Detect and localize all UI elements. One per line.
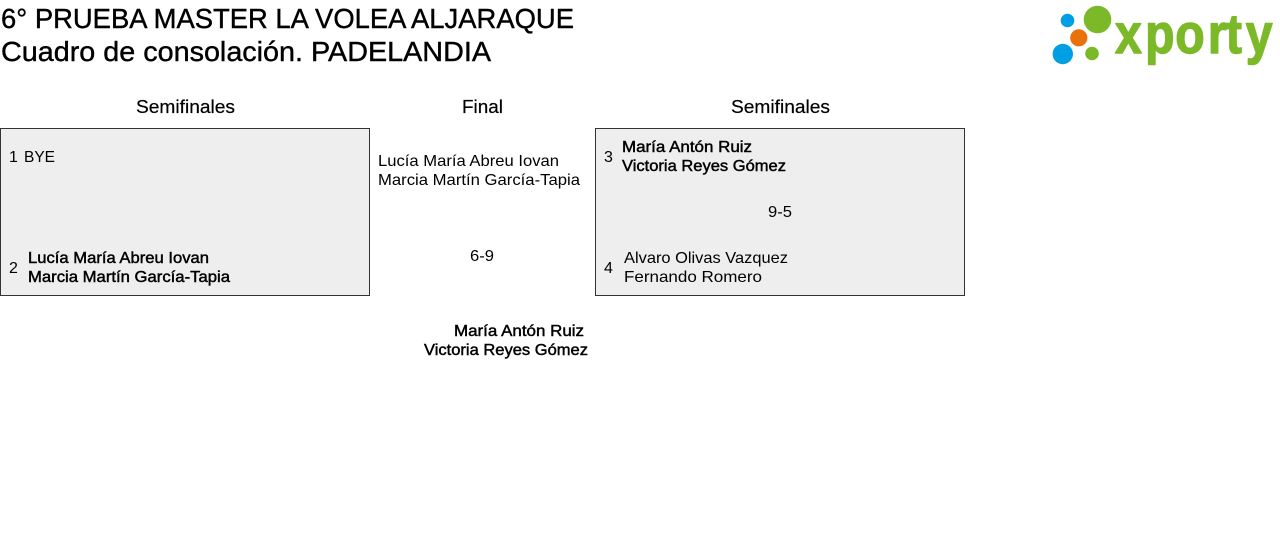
panel: left semifinal: Marcia Martín García-Tapia (28, 269, 230, 286)
panel: left semifinal: 2 (9, 260, 18, 277)
panel: right semifinal: Victoria Reyes Gómez (622, 158, 786, 175)
panel: right semifinal: Alvaro Olivas Vazquez (624, 250, 788, 267)
panel: left semifinal: 1 (9, 149, 18, 166)
final: finalist one: Marcia Martín García-Tapia (378, 172, 580, 189)
logo: xporty: xporty (1115, 4, 1273, 66)
panel: right semifinal: María Antón Ruiz (622, 139, 752, 156)
final: score: 6-9 (470, 248, 494, 265)
title (1, 3, 574, 67)
panel: left semifinal (0, 128, 370, 296)
heading: right semifinals: Semifinales (731, 97, 830, 117)
panel: right semifinal: 4 (604, 260, 613, 277)
panel: right semifinal: 3 (604, 149, 613, 166)
title: 6° PRUEBA MASTER LA VOLEA ALJARAQUE (1, 3, 574, 34)
final: finalist two, winner: María Antón Ruiz (454, 323, 584, 340)
final: finalist one: Lucía María Abreu Iovan (378, 153, 559, 170)
panel: right semifinal (596, 128, 964, 296)
heading: left semifinals: Semifinales (136, 97, 235, 117)
panel: left semifinal: Lucía María Abreu Iovan (28, 250, 209, 267)
panel: right semifinal: Fernando Romero (624, 269, 762, 286)
heading: final: Final (462, 97, 503, 117)
final: finalist one (378, 153, 580, 189)
title: Cuadro de consolación. PADELANDIA (1, 36, 491, 67)
final: finalist two, winner: Victoria Reyes Gómez (424, 342, 588, 359)
panel: right semifinal: 9-5 (768, 204, 792, 221)
panel: left semifinal: BYE (24, 149, 55, 166)
final: finalist two, winner (424, 323, 588, 359)
